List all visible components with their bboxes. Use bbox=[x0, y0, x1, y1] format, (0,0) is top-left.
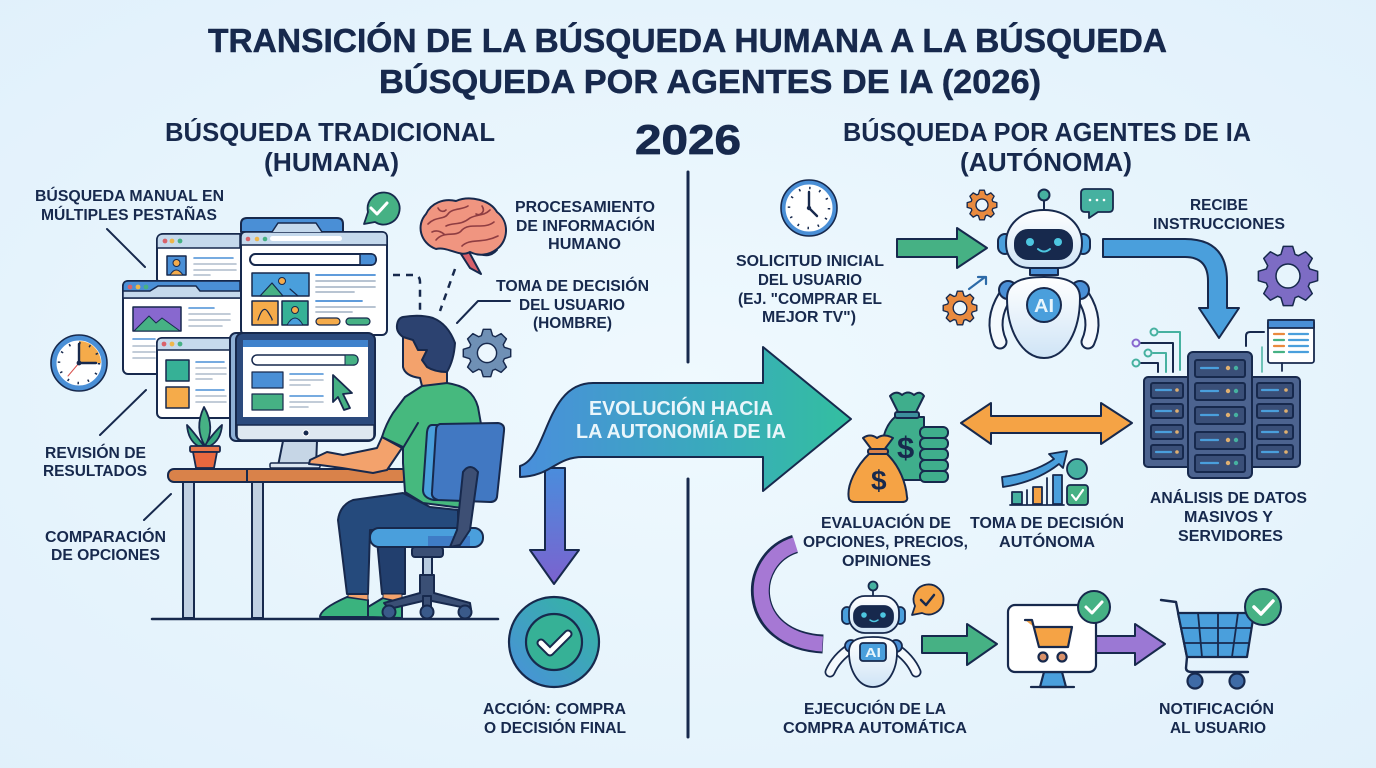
icon: money bags and coins: $ bbox=[871, 465, 887, 496]
title: BÚSQUEDA POR AGENTES DE IA (2026) bbox=[379, 63, 1041, 100]
center divider lower bbox=[686, 479, 690, 737]
back leg bbox=[377, 540, 405, 594]
robot: small bbox=[830, 582, 916, 687]
title bbox=[208, 22, 1167, 100]
office chair bbox=[370, 423, 504, 618]
icon: action check bbox=[509, 597, 599, 687]
label: notificación: NOTIFICACIÓN bbox=[1159, 699, 1274, 718]
robot: main AI: AI bbox=[1034, 296, 1054, 316]
label: solicitud inicial: SOLICITUD INICIAL bbox=[736, 253, 884, 270]
label: recibe instrucciones bbox=[1153, 197, 1285, 233]
label: revisión de resultados: REVISIÓN DE bbox=[45, 443, 146, 462]
icon: money bags and coins bbox=[848, 392, 948, 502]
label: comparación de opciones: COMPARACIÓN bbox=[45, 527, 166, 546]
icon: gear orange top bbox=[967, 190, 997, 220]
icon: shopping cart bbox=[1161, 600, 1254, 688]
leader line: toma de decisión bbox=[457, 301, 510, 323]
arrow: orange double bbox=[961, 403, 1132, 444]
robot: small: AI bbox=[865, 645, 881, 660]
icon: orange check bubble bbox=[912, 584, 944, 615]
heading: búsqueda por agentes de IA bbox=[843, 117, 1251, 177]
label: evaluación: OPCIONES, PRECIOS, bbox=[803, 534, 968, 551]
thigh and front leg bbox=[338, 493, 458, 594]
label: recibe instrucciones: RECIBE bbox=[1190, 197, 1248, 214]
arrow: down to action bbox=[530, 468, 579, 584]
arrow: purple bottom bbox=[1096, 624, 1165, 665]
icon: chat bubble bbox=[1081, 189, 1113, 218]
label: solicitud inicial bbox=[736, 253, 884, 326]
ankles bbox=[348, 594, 402, 602]
label: comparación de opciones bbox=[45, 527, 166, 564]
floor line bbox=[152, 618, 498, 620]
icon: check monitor bbox=[1078, 591, 1110, 623]
label: solicitud inicial: DEL USUARIO bbox=[758, 272, 862, 289]
label: acción bbox=[483, 699, 626, 737]
arrow: evolution: LA AUTONOMÍA DE IA bbox=[576, 420, 786, 443]
heading: year 2026: 2026 bbox=[635, 116, 741, 163]
label: comparación de opciones: DE OPCIONES bbox=[51, 547, 160, 564]
shoes bbox=[320, 597, 368, 617]
label: acción: ACCIÓN: COMPRA bbox=[483, 699, 626, 718]
icon: check cart bbox=[1245, 589, 1281, 625]
label: toma de decisión usuario bbox=[496, 276, 649, 332]
label: análisis de datos bbox=[1150, 488, 1307, 545]
icon: gear slate bbox=[463, 329, 511, 377]
browser window: large bbox=[241, 218, 387, 335]
arrow: evolution bbox=[520, 347, 851, 491]
label: toma de decisión usuario: (HOMBRE) bbox=[533, 315, 612, 332]
browser window: top left bbox=[157, 234, 247, 285]
label: notificación bbox=[1159, 699, 1274, 737]
hair bbox=[397, 316, 455, 372]
coin stack bbox=[920, 427, 948, 482]
small arrow bbox=[969, 277, 986, 289]
label: evaluación bbox=[803, 513, 968, 570]
label: búsqueda manual: MÚLTIPLES PESTAÑAS bbox=[41, 204, 217, 224]
label: procesamiento: PROCESAMIENTO bbox=[515, 199, 655, 216]
label: análisis de datos: ANÁLISIS DE DATOS bbox=[1150, 488, 1307, 507]
neck and face bbox=[403, 335, 447, 386]
center divider upper bbox=[686, 172, 690, 362]
arrow: evolution: EVOLUCIÓN HACIA bbox=[589, 396, 773, 420]
browser window: middle left bbox=[123, 281, 248, 374]
sleeve fold bbox=[403, 423, 418, 448]
dashed connector: brain to head bbox=[440, 269, 455, 311]
server racks bbox=[1144, 352, 1300, 478]
desk bbox=[168, 469, 408, 618]
heading: búsqueda por agentes de IA: (AUTÓNOMA) bbox=[960, 147, 1132, 177]
label: toma de decisión autónoma bbox=[970, 513, 1124, 551]
label: acción: O DECISIÓN FINAL bbox=[484, 718, 626, 737]
torso bbox=[382, 383, 481, 508]
robot: main AI bbox=[996, 190, 1092, 358]
label: búsqueda manual bbox=[35, 186, 224, 224]
label: toma de decisión usuario: TOMA DE DECISIÓN bbox=[496, 276, 649, 295]
arrow: purple arc bbox=[760, 544, 823, 644]
icon: gear orange lower bbox=[943, 291, 977, 325]
icon: clock left bbox=[51, 335, 107, 391]
label: ejecución: COMPRA AUTOMÁTICA bbox=[783, 718, 967, 737]
label: ejecución: EJECUCIÓN DE LA bbox=[804, 699, 946, 718]
label: revisión de resultados bbox=[43, 443, 147, 480]
icon: money bags and coins: $ bbox=[897, 430, 914, 465]
icon: gear purple bbox=[1258, 246, 1318, 306]
person bbox=[309, 316, 481, 618]
label: análisis de datos: MASIVOS Y bbox=[1184, 509, 1273, 526]
heading: búsqueda tradicional: (HUMANA) bbox=[264, 147, 399, 177]
icon: check bubble bbox=[364, 193, 400, 225]
icon: decision chart bbox=[1002, 451, 1088, 505]
arrow: green bottom bbox=[922, 624, 997, 665]
label: evaluación: EVALUACIÓN DE bbox=[821, 513, 951, 532]
icon: clock right bbox=[781, 180, 837, 236]
leader line: comparación bbox=[144, 494, 171, 520]
label: ejecución bbox=[783, 699, 967, 737]
dashed connector: window to head bbox=[393, 275, 420, 312]
label: toma de decisión autónoma: AUTÓNOMA bbox=[999, 532, 1095, 551]
orange bag bbox=[863, 436, 893, 450]
title: TRANSICIÓN DE LA BÚSQUEDA HUMANA A LA BÚSQUEDA bbox=[208, 22, 1167, 59]
label: recibe instrucciones: INSTRUCCIONES bbox=[1153, 216, 1285, 233]
label: búsqueda manual: BÚSQUEDA MANUAL EN bbox=[35, 186, 224, 205]
label: toma de decisión autónoma: TOMA DE DECISIÓN bbox=[970, 513, 1124, 532]
arrow: green to robot bbox=[897, 228, 987, 268]
label: procesamiento: HUMANO bbox=[548, 236, 621, 253]
label: análisis de datos: SERVIDORES bbox=[1178, 528, 1283, 545]
green bag bbox=[890, 392, 924, 412]
monitor bbox=[230, 333, 375, 468]
circuit connectors bbox=[1132, 328, 1264, 372]
heading: búsqueda por agentes de IA: BÚSQUEDA POR AGENTES DE IA bbox=[843, 117, 1251, 147]
browser window: lower left bbox=[157, 338, 237, 418]
leader line: búsqueda manual bbox=[107, 229, 145, 267]
label: solicitud inicial: (EJ. "COMPRAR EL bbox=[738, 291, 882, 308]
label: evaluación: OPINIONES bbox=[842, 553, 931, 570]
icon: brain bbox=[421, 198, 506, 274]
heading: búsqueda tradicional: BÚSQUEDA TRADICIONAL bbox=[165, 117, 495, 147]
arm bbox=[309, 437, 402, 473]
label: toma de decisión usuario: DEL USUARIO bbox=[519, 297, 625, 314]
icon: plant bbox=[187, 407, 222, 468]
arrow: blue elbow to servers bbox=[1103, 239, 1239, 338]
icon: data table bbox=[1268, 320, 1314, 371]
label: notificación: AL USUARIO bbox=[1170, 720, 1266, 737]
leader line: revisión bbox=[100, 390, 146, 435]
icon: monitor with cart bbox=[1008, 605, 1096, 687]
label: revisión de resultados: RESULTADOS bbox=[43, 463, 147, 480]
label: solicitud inicial: MEJOR TV") bbox=[762, 309, 856, 326]
label: procesamiento: DE INFORMACIÓN bbox=[516, 216, 655, 235]
label: procesamiento bbox=[515, 199, 655, 253]
heading: búsqueda tradicional bbox=[165, 117, 495, 177]
